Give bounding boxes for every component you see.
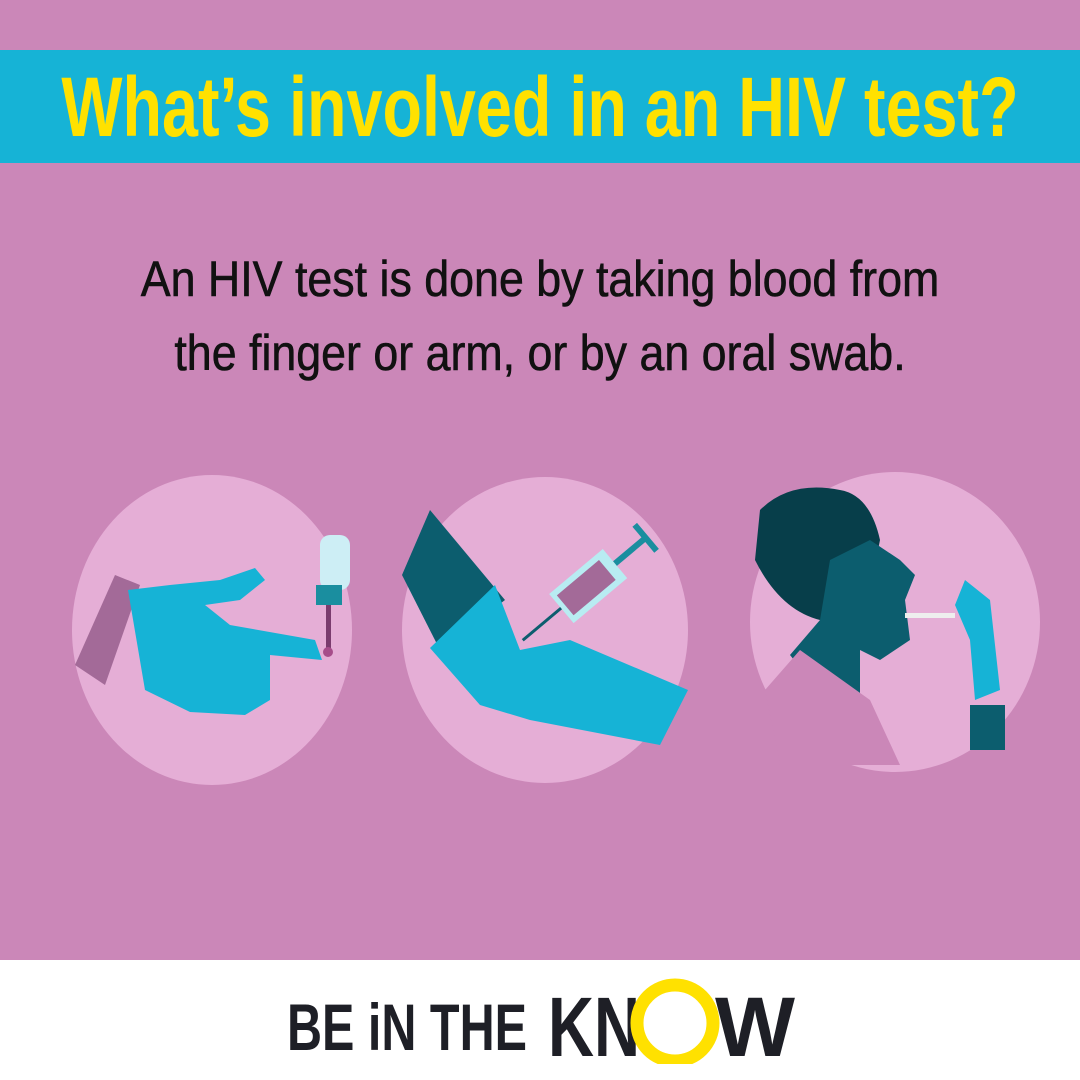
icon: syringe in arm [402,477,688,783]
body text [140,251,939,381]
title: What’s involved in an HIV test? [61,60,1019,154]
body text: the finger or arm, or by an oral swab. [174,325,906,381]
header band [0,50,1080,163]
footer [0,960,1080,1080]
logo: BE iN THE [287,990,527,1064]
icon: finger prick [72,475,352,785]
body text: An HIV test is done by taking blood from [141,251,939,307]
logo [287,978,796,1064]
icon: oral swab [750,472,1040,772]
